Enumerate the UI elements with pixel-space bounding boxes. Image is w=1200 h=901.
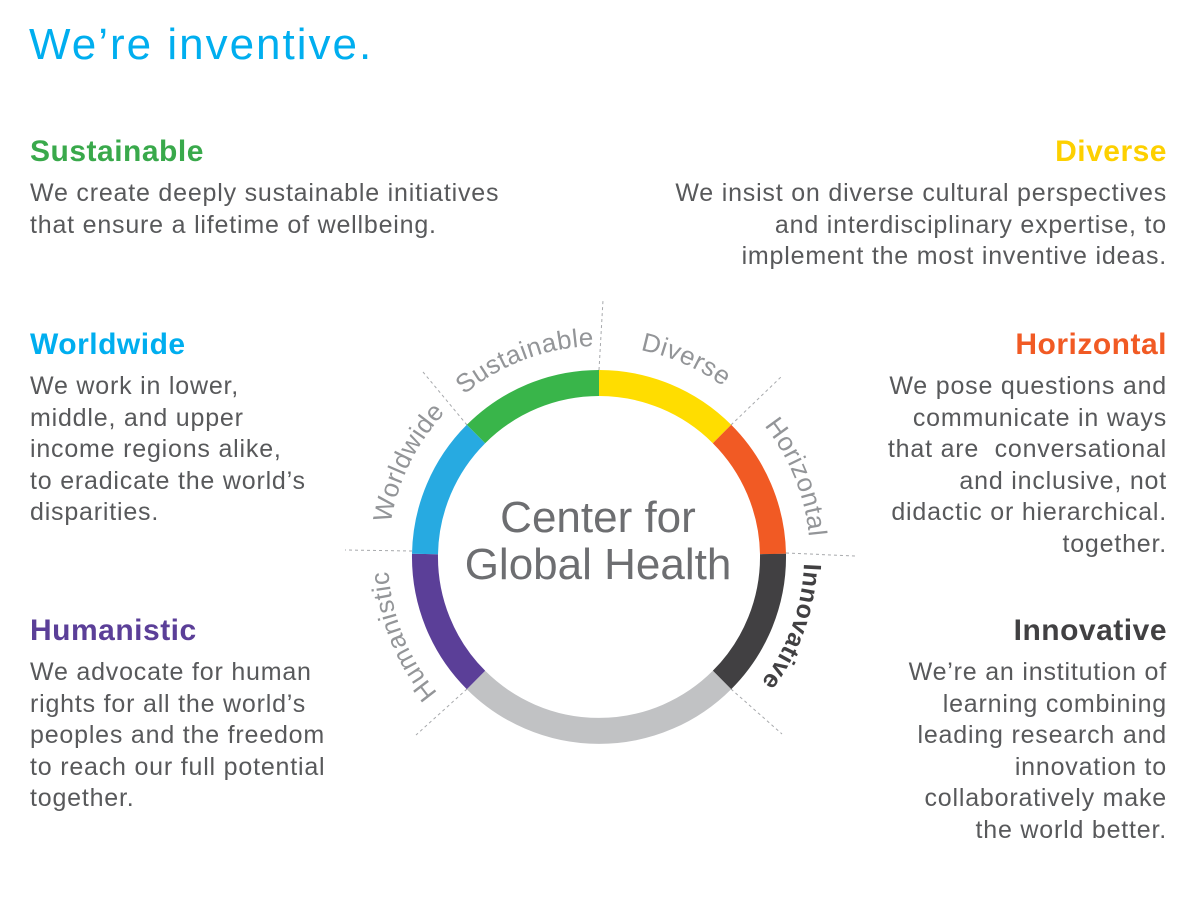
text: horizontal: We pose questions and [889, 372, 1167, 400]
center label: Center for [500, 493, 696, 542]
text: sustainable: that ensure a lifetime of wellbeing. [30, 210, 437, 238]
ring labels: Sustainable [456, 328, 592, 392]
panel: diverse [675, 135, 1167, 270]
panel: innovative [908, 614, 1167, 844]
text: innovative: We’re an institution of [909, 658, 1167, 686]
heading: diverse: Diverse [1055, 135, 1167, 168]
text: horizontal: and inclusive, not [959, 466, 1167, 494]
text: innovative: innovation to [1015, 752, 1167, 780]
panel: humanistic [30, 614, 325, 812]
heading: sustainable: Sustainable [30, 135, 204, 168]
title: We’re inventive. [29, 20, 373, 69]
ring labels: Innovative [764, 565, 822, 688]
heading: humanistic: Humanistic [30, 614, 197, 647]
heading: innovative: Innovative [1014, 614, 1167, 647]
text: sustainable [30, 179, 499, 238]
text: diverse: We insist on diverse cultural perspectives [675, 179, 1167, 207]
center label [465, 493, 731, 589]
text: worldwide: We work in lower, [30, 372, 239, 400]
ring segments [425, 383, 773, 731]
text: innovative: learning combining [943, 690, 1167, 718]
ring labels: Worldwide [373, 406, 442, 520]
text: worldwide [30, 372, 306, 526]
text: worldwide: disparities. [30, 498, 159, 526]
text: horizontal [888, 372, 1167, 558]
center label: Global Health [465, 540, 731, 589]
text: humanistic [30, 658, 325, 812]
text: horizontal: together. [1062, 530, 1167, 558]
panel: horizontal [888, 328, 1167, 558]
panel: worldwide [30, 328, 306, 526]
text: sustainable: We create deeply sustainable initiatives [30, 179, 499, 207]
text: innovative: collaboratively make [924, 784, 1167, 812]
ring labels: Diverse [642, 333, 728, 384]
text: humanistic: We advocate for human [30, 658, 312, 686]
ring labels [371, 328, 828, 702]
text: diverse [675, 179, 1167, 270]
ring labels: Humanistic [371, 572, 436, 702]
text: worldwide: middle, and upper [30, 404, 244, 432]
heading: horizontal: Horizontal [1015, 328, 1167, 361]
text: worldwide: to eradicate the world’s [30, 466, 306, 494]
text: horizontal: didactic or hierarchical. [891, 498, 1167, 526]
text: diverse: and interdisciplinary expertise, to [775, 210, 1167, 238]
text: worldwide: income regions alike, [30, 435, 282, 463]
text: diverse: implement the most inventive ideas. [742, 242, 1167, 270]
text: humanistic: peoples and the freedom [30, 721, 325, 749]
text: humanistic: rights for all the world’s [30, 690, 306, 718]
text: horizontal: communicate in ways [913, 404, 1167, 432]
ring labels: Horizontal [766, 416, 828, 535]
text: humanistic: together. [30, 784, 135, 812]
heading: worldwide: Worldwide [30, 328, 186, 361]
text: innovative: the world better. [976, 816, 1167, 844]
text: innovative [908, 658, 1167, 844]
text: horizontal: that are conversational [888, 435, 1167, 463]
text: innovative: leading research and [918, 721, 1167, 749]
text: humanistic: to reach our full potential [30, 752, 325, 780]
panel: sustainable [30, 135, 499, 238]
